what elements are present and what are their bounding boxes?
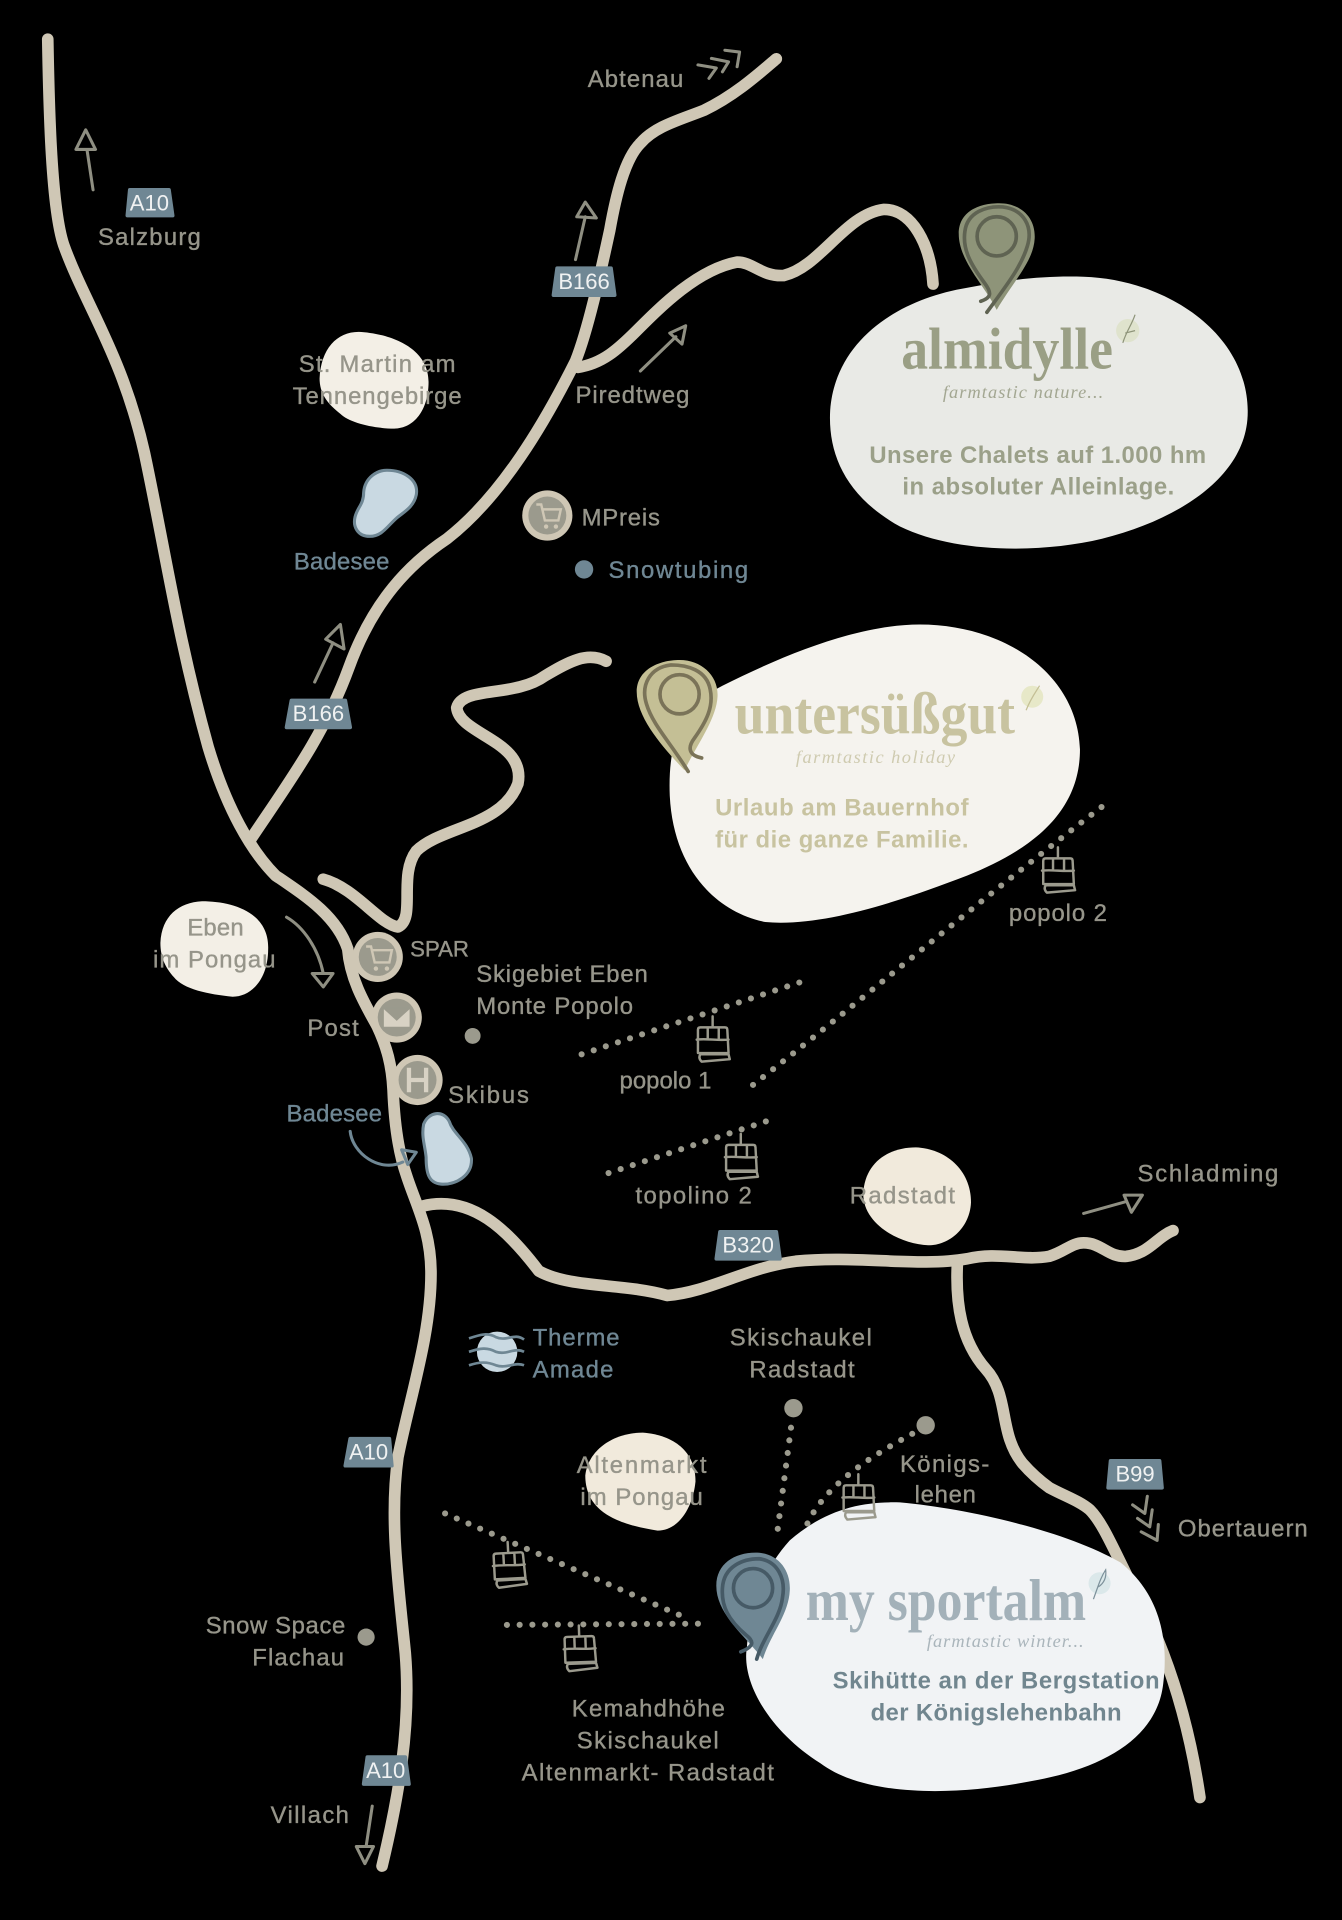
tagline: my sportalm: farmtastic winter... [927,1631,1084,1651]
label: Skigebiet Eben Monte Popolo: Monte Popolo [476,993,633,1020]
arrow: Piredtweg [640,326,686,371]
arrow: Villach [356,1806,373,1864]
road: serpentine to untersuessgut [323,657,606,927]
label: Altenmarkt im Pongau: Altenmarkt [577,1452,707,1479]
gondola: popolo 2 [1042,847,1075,893]
arrow: Abtenau chevrons [698,50,740,78]
text: almidylle description: in absoluter Alleinlage. [902,474,1174,501]
badge: B166 upper: B166 [558,269,610,294]
gondola: Kemahdhoehe [492,1541,527,1588]
label: popolo 2: popolo 2 [1009,900,1107,927]
badge: B99: B99 [1115,1462,1155,1487]
label: popolo 1: popolo 1 [620,1068,711,1095]
marker: Snowtubing [575,560,593,579]
label: Kemahdhoehe Skischaukel: Skischaukel [577,1728,719,1755]
label: MPreis: MPreis [582,504,660,531]
logo: my sportalm: my sportalm [806,1568,1086,1633]
blob: almidylle [830,277,1248,549]
pin: almidylle [959,203,1035,312]
label: Therme Amade: Amade [533,1357,613,1384]
blob: Altenmarkt [585,1433,695,1531]
label: Snow Space Flachau: Flachau [252,1644,344,1671]
road: B320 [422,1204,1173,1296]
label: St. Martin am Tennengebirge: Tennengebirge [293,383,462,410]
label: topolino 2: topolino 2 [635,1183,752,1210]
gondola: Koenigslehen [842,1474,875,1520]
label: SPAR: SPAR [410,936,469,961]
badge: A10 lower: A10 [366,1758,405,1783]
text: untersuessgut description [715,795,969,853]
pin: my sportalm [716,1553,790,1659]
label: Snow Space Flachau [206,1612,345,1671]
blob: Eben im Pongau [160,901,268,997]
label: Koenigslehen [900,1451,989,1508]
icon: Therme waves [469,1332,524,1372]
cable line: topolino 2 [609,1119,773,1173]
label: Skigebiet Eben Monte Popolo [476,961,648,1020]
blob: St. Martin [320,332,429,429]
gondola: Skischaukel Altenmarkt [563,1625,598,1671]
label: Skibus: Skibus [448,1082,529,1109]
gondola: topolino 2 [725,1134,758,1179]
label: Radstadt town: Radstadt [850,1183,955,1210]
text: almidylle description [869,442,1206,501]
icon: upper lake [354,470,417,536]
label: Koenigslehen: Königs- [900,1451,989,1478]
arrow: B166 upper [575,202,596,260]
cable line: Skischaukel Altenmarkt [507,1624,702,1625]
logo: untersuessgut: untersüßgut [735,681,1015,746]
icon: leaf my sportalm [1089,1570,1111,1599]
label: Altenmarkt im Pongau [577,1452,707,1511]
road: B166 [251,59,776,839]
label: Altenmarkt im Pongau: im Pongau [580,1484,703,1511]
road: B99 Obertauern [957,1261,1200,1798]
pin: untersuessgut [637,660,718,771]
text: untersuessgut description: für die ganze Familie. [715,826,969,853]
label: Skigebiet Eben Monte Popolo: Skigebiet Eben [476,961,648,988]
tagline: untersuessgut: farmtastic holiday [796,747,956,767]
panel: my sportalm [746,1502,1165,1791]
label: Snow Space Flachau: Snow Space [206,1612,345,1639]
badge: B166 lower: B166 [293,701,344,726]
arrow: Schladming [1084,1195,1142,1213]
label: St. Martin am Tennengebirge [293,351,462,410]
badge: B320: B320 [722,1233,774,1258]
blob: my sportalm [746,1502,1165,1791]
label: Badesee upper: Badesee [294,548,389,575]
label: Eben im Pongau: Eben [187,915,244,942]
label: Skischaukel Radstadt [730,1325,872,1384]
icon: lower lake [423,1114,471,1184]
road: Piredtweg to almidylle [578,209,933,367]
label: Piredtweg: Piredtweg [575,382,689,409]
text: my sportalm description [833,1668,1160,1726]
panel: untersuessgut [670,624,1080,923]
text: my sportalm description: Skihütte an der Bergstation [833,1668,1160,1695]
label: Kemahdhoehe Skischaukel: Kemahdhöhe [572,1696,725,1723]
label: Skischaukel Radstadt: Radstadt [749,1357,855,1384]
logo: almidylle: almidylle [901,317,1113,382]
label: Villach: Villach [271,1802,349,1829]
icon: leaf almidylle [1116,315,1139,343]
label: Therme Amade [533,1325,620,1384]
label: Eben im Pongau [153,915,276,973]
text: my sportalm description: der Königslehenbahn [871,1699,1122,1726]
label: Skischaukel Radstadt: Skischaukel [730,1325,872,1352]
marker: Skischaukel Radstadt [784,1399,803,1417]
icon: Skibus H [392,1055,443,1105]
arrow: B166 lower [315,624,344,682]
cable line: Kemahdhoehe [445,1513,688,1619]
label: St. Martin am Tennengebirge: St. Martin am [299,351,455,378]
icon: Post envelope [372,992,422,1043]
label: Kemahdhoehe Skischaukel: Altenmarkt- Radstadt [522,1759,774,1786]
label: Koenigslehen: lehen [915,1481,976,1508]
label: Snowtubing: Snowtubing [609,557,748,584]
arrow: Salzburg [76,130,96,190]
cable line: popolo 1 [582,980,808,1054]
label: Obertauern: Obertauern [1178,1516,1308,1543]
marker: Skigebiet [465,1028,481,1044]
panel: almidylle [830,277,1248,549]
arrow: Eben im Pongau [287,917,333,987]
marker: Snow Space [358,1629,375,1646]
arrow: Badesee [350,1131,416,1165]
blob: untersuessgut [670,624,1080,923]
icon: SPAR cart [353,932,403,982]
label: Eben im Pongau: im Pongau [153,946,276,973]
badge: A10 Salzburg: A10 [130,191,169,216]
text: almidylle description: Unsere Chalets auf 1.000 hm [869,442,1206,469]
cable line: Skischaukel Radstadt [778,1428,791,1531]
label: Therme Amade: Therme [533,1325,620,1352]
cable line: popolo 2 [753,806,1103,1085]
label: Schladming: Schladming [1138,1161,1278,1188]
label: Abtenau: Abtenau [588,66,683,93]
label: Badesee lower: Badesee [287,1101,382,1128]
marker: Koenigslehen [917,1416,935,1434]
icon: MPreis cart [522,490,572,541]
icon: leaf untersuessgut [1021,686,1043,710]
tagline: almidylle: farmtastic nature... [943,382,1103,402]
cable line: Koenigslehen [804,1434,912,1531]
blob: Radstadt [863,1147,971,1245]
badge: B99 [1108,1461,1162,1488]
label: Kemahdhoehe Skischaukel [522,1696,774,1786]
label: Post: Post [307,1015,359,1042]
text: untersuessgut description: Urlaub am Bauernhof [715,795,969,822]
arrow: Obertauern chevrons [1133,1496,1158,1540]
badge: A10 middle: A10 [349,1440,388,1465]
label: Salzburg: Salzburg [98,224,201,251]
road: A10 motorway [48,39,431,1866]
gondola: popolo 1 [697,1016,730,1062]
